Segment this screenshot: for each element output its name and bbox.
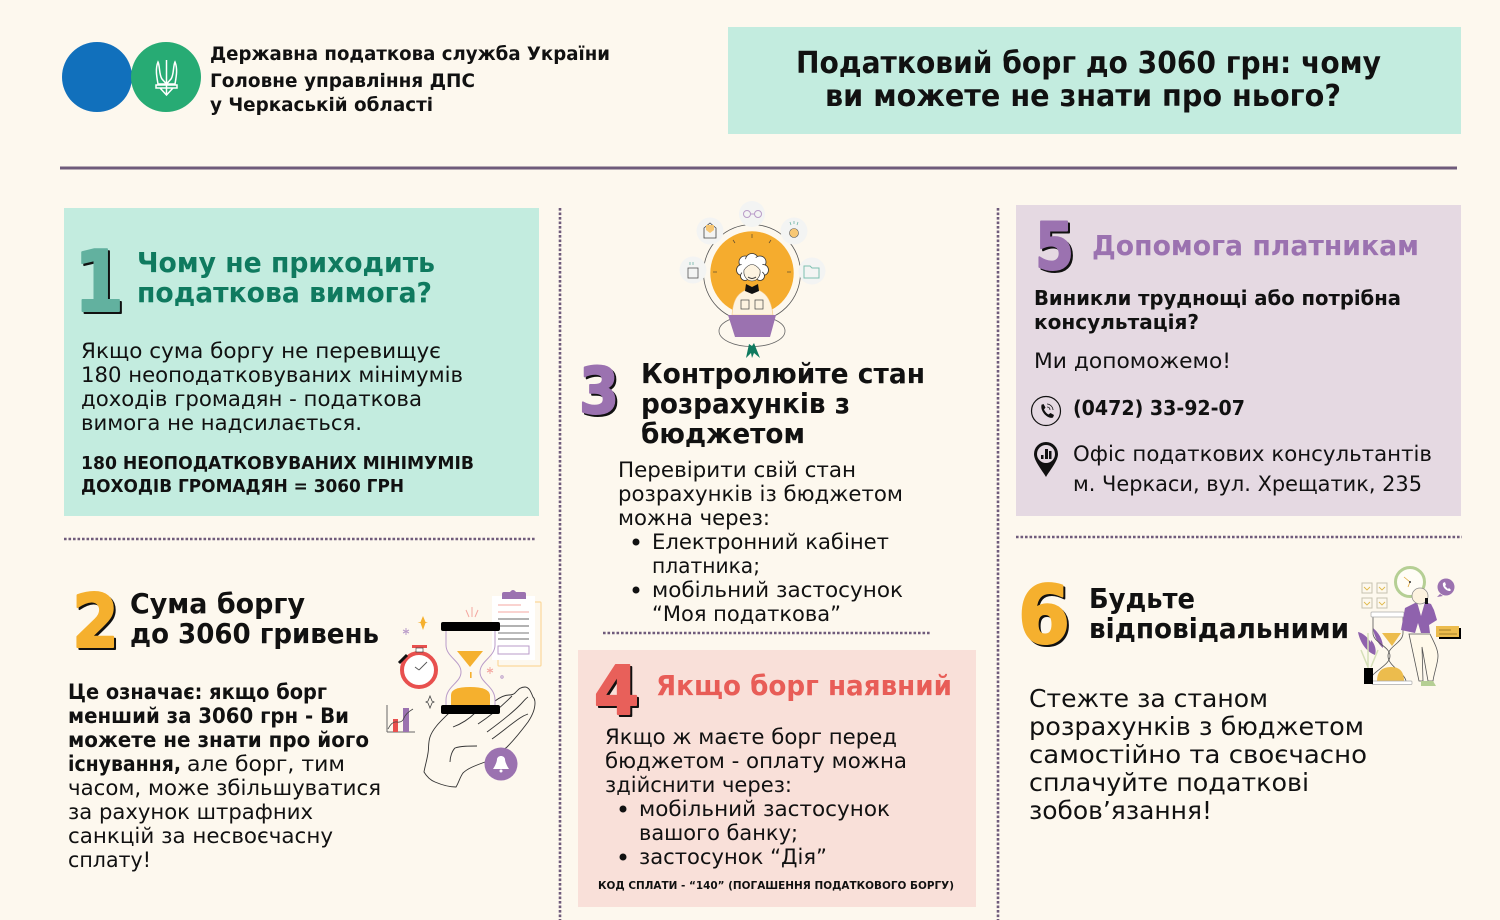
title banner <box>728 27 1461 134</box>
number 2: 2 <box>72 579 119 665</box>
illustration: person with phone by hourglass <box>1358 568 1461 686</box>
question text <box>1034 286 1401 334</box>
body 6: Стежте за станом <box>1029 684 1268 713</box>
body 3: Електронний кабінет <box>652 530 889 554</box>
body 4: бюджетом - оплату можна <box>605 749 907 773</box>
illustration: person at laptop in a clock <box>680 201 826 358</box>
body 2: менший за 3060 грн - Ви <box>68 704 349 728</box>
body 1 <box>81 339 463 435</box>
payment code note: КОД СПЛАТИ - “140” (ПОГАШЕННЯ ПОДАТКОВОГО БОРГУ) <box>598 879 954 892</box>
body 3: можна через: <box>618 506 770 530</box>
body 6: розрахунків з бюджетом <box>1029 712 1364 741</box>
panel 3: check your account status <box>579 201 925 626</box>
heading 2: Сума боргу <box>130 587 305 620</box>
body 4: Якщо ж маєте борг перед <box>605 725 897 749</box>
office address: м. Черкаси, вул. Хрещатик, 235 <box>1073 472 1422 496</box>
heading 2 <box>130 587 379 650</box>
body 2 <box>68 680 381 872</box>
panel 5: taxpayer help <box>1016 205 1461 516</box>
office address: Офіс податкових консультантів <box>1073 442 1432 466</box>
logo: tax service emblem <box>62 42 201 112</box>
body 3: розрахунків із бюджетом <box>618 482 903 506</box>
organisation name <box>210 43 610 116</box>
question text: Виникли труднощі або потрібна <box>1034 286 1401 310</box>
heading 6: відповідальними <box>1089 612 1349 645</box>
body 6: сплачуйте податкові <box>1029 768 1309 797</box>
body 1: доходів громадян - податкова <box>81 387 422 411</box>
title banner: ви можете не знати про нього? <box>825 79 1341 114</box>
body 4: вашого банку; <box>639 821 798 845</box>
body 1: 180 неоподатковуваних мінімумів <box>81 363 463 387</box>
body 3: “Моя податкова” <box>652 602 841 626</box>
body 6 <box>1029 684 1367 825</box>
number 1: 1 <box>74 233 124 332</box>
body 4: застосунок “Дія” <box>639 845 827 869</box>
body 1: вимога не надсилається. <box>81 411 362 435</box>
icon: phone <box>1032 396 1060 426</box>
heading 1 <box>137 246 435 309</box>
panel 6: be responsible <box>1018 568 1461 825</box>
organisation name: у Черкаській області <box>210 94 433 116</box>
heading 3: розрахунків з <box>641 387 850 420</box>
body 3: Перевірити свій стан <box>618 458 856 482</box>
body 6: самостійно та своєчасно <box>1029 740 1367 769</box>
note: 180 minimums equals 3060 UAH: ДОХОДІВ ГРОМАДЯН = 3060 ГРН <box>81 476 404 497</box>
heading 3: бюджетом <box>641 417 805 450</box>
panel 2: debt up to 3060 <box>68 579 541 872</box>
heading 6 <box>1089 582 1349 645</box>
note: 180 minimums equals 3060 UAH <box>81 453 474 497</box>
office address <box>1073 442 1432 496</box>
illustration: hourglass on a hand <box>387 590 541 787</box>
body 2: за рахунок штрафних <box>68 800 313 824</box>
body 2: але борг, тим <box>187 752 345 776</box>
body 3: мобільний застосунок <box>652 578 903 602</box>
heading 1: Чому не приходить <box>137 246 435 279</box>
heading 3 <box>641 357 925 450</box>
phone number: (0472) 33-92-07 <box>1073 396 1245 420</box>
body 1: Якщо сума боргу не перевищує <box>81 339 441 363</box>
number 3: 3 <box>581 357 621 431</box>
panel 4: if the debt exists <box>578 650 976 907</box>
number 1: 1 <box>76 235 126 334</box>
number 5: 5 <box>1035 210 1074 285</box>
body 2: Це означає: якщо борг <box>68 680 327 704</box>
number 4: 4 <box>596 654 641 732</box>
heading 3: Контролюйте стан <box>641 357 925 390</box>
title banner: Податковий борг до 3060 грн: чому <box>796 46 1381 81</box>
heading 4: Якщо борг наявний <box>656 669 952 702</box>
body 4: мобільний застосунок <box>639 797 890 821</box>
number 4: 4 <box>594 652 639 730</box>
reassurance text: Ми допоможемо! <box>1034 349 1231 373</box>
panel 1: why no notice arrives <box>64 208 539 516</box>
heading 6: Будьте <box>1089 582 1195 615</box>
number 2: 2 <box>74 581 121 667</box>
body 2: сплату! <box>68 848 151 872</box>
heading 5: Допомога платникам <box>1092 229 1419 262</box>
heading 1: податкова вимога? <box>137 276 432 309</box>
number 3: 3 <box>579 355 619 429</box>
number 5: 5 <box>1037 212 1076 287</box>
note: 180 minimums equals 3060 UAH: 180 НЕОПОДАТКОВУВАНИХ МІНІМУМІВ <box>81 453 474 474</box>
icon: location pin <box>1034 442 1058 477</box>
body 3 <box>618 458 903 626</box>
body 2: санкцій за несвоєчасну <box>68 824 333 848</box>
number 6: 6 <box>1018 569 1070 662</box>
body 2: часом, може збільшуватися <box>68 776 381 800</box>
body 2: існування, <box>68 752 181 776</box>
body 6: зобов’язання! <box>1029 796 1212 825</box>
organisation name: Головне управління ДПС <box>210 70 475 92</box>
organisation name: Державна податкова служба України <box>210 43 610 65</box>
question text: консультація? <box>1034 310 1199 334</box>
heading 2: до 3060 гривень <box>130 617 379 650</box>
body 4 <box>605 725 907 869</box>
body 2: можете не знати про його <box>68 728 369 752</box>
body 4: здійснити через: <box>605 773 792 797</box>
number 6: 6 <box>1020 571 1072 664</box>
body 3: платника; <box>652 554 760 578</box>
